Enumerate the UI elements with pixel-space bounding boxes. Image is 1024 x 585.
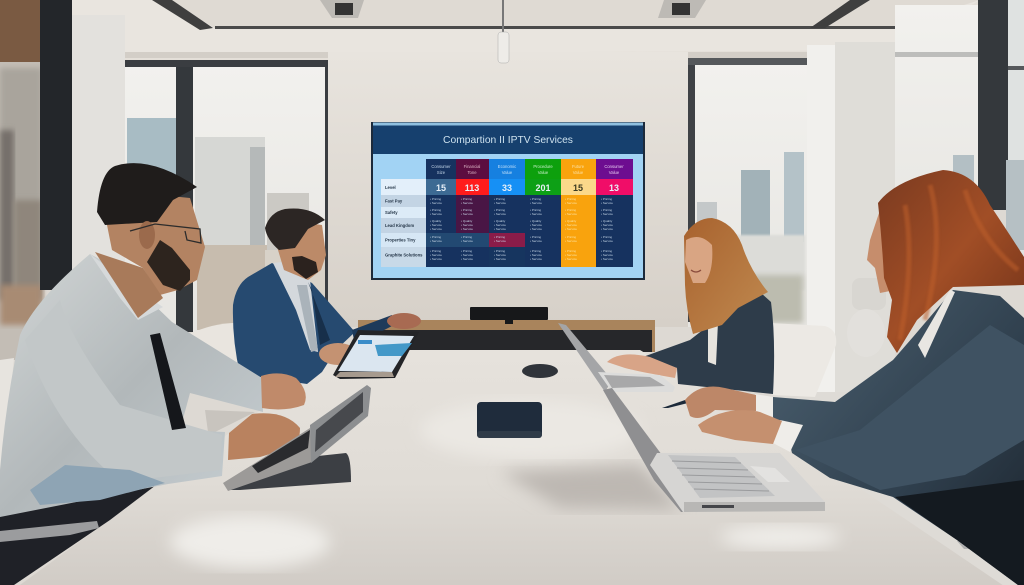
TV comparison table: • Service bbox=[430, 239, 442, 243]
TV comparison table: Lead Kingdom bbox=[385, 223, 414, 228]
TV comparison table: Safety bbox=[385, 210, 398, 215]
credenza bbox=[358, 320, 655, 352]
TV comparison table: Consumer bbox=[604, 164, 624, 169]
lid bbox=[603, 388, 690, 512]
hair highlights bbox=[900, 185, 1018, 340]
under-arm chair frame bbox=[205, 410, 255, 432]
face bbox=[867, 210, 895, 293]
TV comparison table: • Service bbox=[494, 239, 506, 243]
neck bbox=[95, 252, 163, 318]
glasses bbox=[130, 224, 201, 243]
shirt torso bbox=[0, 254, 263, 517]
TV comparison table: • Quality bbox=[565, 219, 577, 223]
hair bbox=[878, 170, 1024, 353]
sleeve highlight bbox=[795, 325, 1024, 490]
TV comparison table: 15 bbox=[436, 183, 446, 193]
shirt and tie bbox=[273, 262, 318, 352]
pocket shadow bbox=[895, 480, 1024, 585]
TV comparison table: • Service bbox=[530, 253, 542, 257]
TV comparison table: • Service bbox=[430, 212, 442, 216]
TV comparison table: • Pricing bbox=[565, 197, 576, 201]
man's tablet laptop on dark pad bbox=[223, 385, 371, 491]
TV comparison table: Financial bbox=[464, 164, 480, 169]
table reflections bbox=[170, 400, 840, 568]
white collar bbox=[918, 290, 955, 358]
TV comparison table: • Service bbox=[601, 257, 613, 261]
left window with skyline bbox=[125, 60, 328, 332]
TV comparison table: • Service bbox=[601, 253, 613, 257]
woman's small laptop bbox=[558, 323, 675, 392]
trousers bbox=[0, 482, 160, 585]
beard bbox=[147, 240, 190, 291]
white blouse bbox=[708, 322, 718, 365]
TV comparison table: • Pricing bbox=[461, 197, 472, 201]
TV comparison table: • Service bbox=[601, 223, 613, 227]
TV comparison table bbox=[381, 159, 633, 267]
navy blazer bbox=[233, 263, 355, 384]
TV comparison table: • Quality bbox=[530, 219, 542, 223]
ceiling bbox=[0, 0, 1024, 60]
TV comparison table: • Service bbox=[430, 201, 442, 205]
TV comparison table: 201 bbox=[535, 183, 551, 193]
TV comparison table: • Service bbox=[430, 227, 442, 231]
TV comparison table: • Service bbox=[530, 227, 542, 231]
tablet with dashboard bbox=[333, 330, 419, 379]
TV comparison table: • Service bbox=[530, 257, 542, 261]
TV comparison table: • Pricing bbox=[530, 235, 541, 239]
TV comparison table: • Service bbox=[494, 227, 506, 231]
TV comparison table: Level bbox=[385, 185, 396, 190]
chair arm bbox=[0, 521, 99, 542]
far sleeve bbox=[352, 315, 392, 345]
TV comparison table: • Service bbox=[601, 201, 613, 205]
TV comparison table: • Pricing bbox=[494, 235, 505, 239]
chair back behind first man bbox=[0, 358, 14, 470]
TV comparison table: • Pricing bbox=[494, 197, 505, 201]
TV comparison table: Value bbox=[502, 170, 513, 175]
TV comparison table: • Service bbox=[494, 223, 506, 227]
floor strip behind table bbox=[770, 392, 1024, 585]
TV comparison table: • Service bbox=[494, 253, 506, 257]
TV comparison table: 15 bbox=[573, 183, 583, 193]
trackpad bbox=[750, 466, 790, 482]
pen bbox=[662, 399, 688, 408]
TV comparison table: • Service bbox=[461, 227, 473, 231]
TV comparison table: • Service bbox=[430, 253, 442, 257]
TV comparison table: • Service bbox=[565, 212, 577, 216]
hand on tablet bbox=[319, 343, 357, 365]
TV comparison table: • Service bbox=[601, 227, 613, 231]
lower hand bbox=[698, 410, 782, 444]
shirt lower blue shade bbox=[30, 465, 165, 505]
head skin bbox=[105, 195, 205, 295]
TV comparison table: • Service bbox=[530, 239, 542, 243]
far left window with wooden ceiling bbox=[0, 0, 72, 360]
TV comparison table: • Pricing bbox=[461, 208, 472, 212]
dark lapel shadow bbox=[308, 282, 330, 345]
TV comparison table: Future bbox=[572, 164, 585, 169]
ear bbox=[139, 221, 155, 249]
TV comparison table: • Pricing bbox=[430, 208, 441, 212]
TV comparison table: Tone bbox=[467, 170, 477, 175]
TV comparison table: • Pricing bbox=[601, 197, 612, 201]
hair bbox=[97, 163, 197, 225]
TV comparison table: • Service bbox=[494, 212, 506, 216]
laptop shadow on table bbox=[500, 464, 682, 510]
TV comparison table: Value bbox=[538, 170, 549, 175]
hair bbox=[265, 208, 325, 250]
TV header bar: Compartion II IPTV Services bbox=[443, 135, 573, 146]
TV comparison table: • Pricing bbox=[530, 249, 541, 253]
chair behind second man bbox=[187, 323, 242, 375]
TV comparison table: • Service bbox=[565, 201, 577, 205]
chair bbox=[770, 323, 836, 397]
lower shirt cuff bbox=[773, 420, 803, 452]
collar bbox=[90, 254, 163, 320]
screen bbox=[310, 385, 371, 463]
TV comparison table: Consumer bbox=[431, 164, 451, 169]
keyboard bbox=[668, 455, 775, 498]
TV comparison table: • Service bbox=[461, 257, 473, 261]
TV comparison table: • Service bbox=[601, 212, 613, 216]
TV comparison table: • Service bbox=[530, 212, 542, 216]
white pillar bbox=[807, 42, 898, 395]
face bbox=[685, 237, 712, 283]
TV comparison table: • Service bbox=[565, 223, 577, 227]
TV comparison table: • Quality bbox=[601, 219, 613, 223]
TV comparison table: • Pricing bbox=[530, 197, 541, 201]
white wall column bbox=[72, 15, 125, 315]
large laptop in foreground bbox=[603, 388, 825, 512]
TV comparison table: • Service bbox=[461, 239, 473, 243]
TV comparison table: • Pricing bbox=[430, 197, 441, 201]
head skin bbox=[275, 222, 326, 280]
base and keyboard bbox=[223, 428, 312, 491]
upper hand bbox=[261, 373, 306, 409]
lower arm and hand bbox=[228, 413, 300, 460]
TV comparison table: • Service bbox=[565, 227, 577, 231]
TV comparison table: • Pricing bbox=[430, 235, 441, 239]
smartphone on table bbox=[477, 402, 542, 438]
TV comparison table: • Service bbox=[565, 257, 577, 261]
TV comparison table: • Service bbox=[430, 257, 442, 261]
soundbar bbox=[470, 307, 548, 324]
TV comparison table: Properties Tiny bbox=[385, 238, 416, 242]
TV comparison table: • Service bbox=[461, 223, 473, 227]
wall TV showing comparison table bbox=[371, 122, 645, 280]
keyboard rows bbox=[672, 461, 769, 491]
TV comparison table: • Pricing bbox=[461, 235, 472, 239]
TV comparison table: • Service bbox=[461, 201, 473, 205]
TV comparison table: • Pricing bbox=[601, 208, 612, 212]
TV comparison table: • Service bbox=[461, 253, 473, 257]
hands bbox=[607, 354, 677, 378]
TV comparison table: • Pricing bbox=[461, 249, 472, 253]
TV comparison table: • Pricing bbox=[430, 249, 441, 253]
TV comparison table: • Pricing bbox=[565, 249, 576, 253]
far hand bbox=[387, 313, 421, 329]
TV comparison table: • Quality bbox=[494, 219, 506, 223]
TV comparison table: • Quality bbox=[430, 219, 442, 223]
base bbox=[650, 453, 825, 512]
TV comparison table: • Service bbox=[461, 212, 473, 216]
TV comparison table: Value bbox=[573, 170, 584, 175]
bottom chair arm bbox=[957, 540, 1024, 549]
smile bbox=[691, 270, 701, 272]
TV comparison table: • Pricing bbox=[494, 249, 505, 253]
upper hand bbox=[685, 386, 756, 418]
TV comparison table: • Pricing bbox=[494, 208, 505, 212]
front edge with ports bbox=[684, 502, 825, 512]
TV comparison table: • Pricing bbox=[601, 249, 612, 253]
TV comparison table: • Quality bbox=[461, 219, 473, 223]
TV comparison table: • Pricing bbox=[565, 208, 576, 212]
TV comparison table: Economic bbox=[498, 164, 516, 169]
TV comparison table: • Service bbox=[530, 201, 542, 205]
TV comparison table: • Service bbox=[494, 201, 506, 205]
lanyard strap bbox=[150, 333, 186, 430]
man in grey shirt bbox=[0, 163, 306, 585]
blazer bbox=[640, 283, 774, 394]
TV comparison table: Graphite Solutions bbox=[385, 252, 423, 258]
TV comparison table: Size bbox=[437, 170, 446, 175]
computer mouse bbox=[522, 364, 558, 378]
dark pad bbox=[228, 453, 351, 490]
TV comparison table: 113 bbox=[465, 183, 479, 193]
back wall bbox=[328, 52, 688, 327]
right window with skyline bbox=[688, 58, 810, 327]
conference table bbox=[13, 350, 1010, 585]
hair bbox=[684, 218, 768, 334]
woman in foreground bbox=[685, 170, 1024, 585]
TV comparison table: Fast Pay bbox=[385, 198, 403, 204]
seated man in navy blazer bbox=[233, 208, 421, 384]
TV comparison table: • Service bbox=[430, 223, 442, 227]
TV comparison table: • Service bbox=[530, 223, 542, 227]
TV comparison table: • Service bbox=[565, 253, 577, 257]
TV comparison table: • Service bbox=[494, 257, 506, 261]
TV header bar bbox=[373, 122, 643, 154]
TV comparison table: • Pricing bbox=[601, 235, 612, 239]
TV comparison table: • Pricing bbox=[565, 235, 576, 239]
far right window bbox=[895, 0, 1024, 270]
sleeve folds bbox=[25, 300, 222, 482]
pendant lamp bbox=[498, 0, 509, 63]
TV comparison table: 13 bbox=[609, 183, 619, 193]
TV comparison table: 33 bbox=[502, 183, 512, 193]
upper shirt cuff bbox=[755, 394, 773, 417]
dark blazer body bbox=[773, 290, 1024, 585]
wall-mounted white fixture bbox=[847, 278, 886, 357]
TV comparison table: • Service bbox=[601, 239, 613, 243]
beard bbox=[292, 256, 318, 279]
seated woman with laptop bbox=[607, 218, 836, 397]
TV comparison table: Procedure bbox=[533, 164, 553, 169]
TV comparison table: Value bbox=[609, 170, 620, 175]
TV comparison table: • Service bbox=[565, 239, 577, 243]
TV comparison table: • Pricing bbox=[530, 208, 541, 212]
